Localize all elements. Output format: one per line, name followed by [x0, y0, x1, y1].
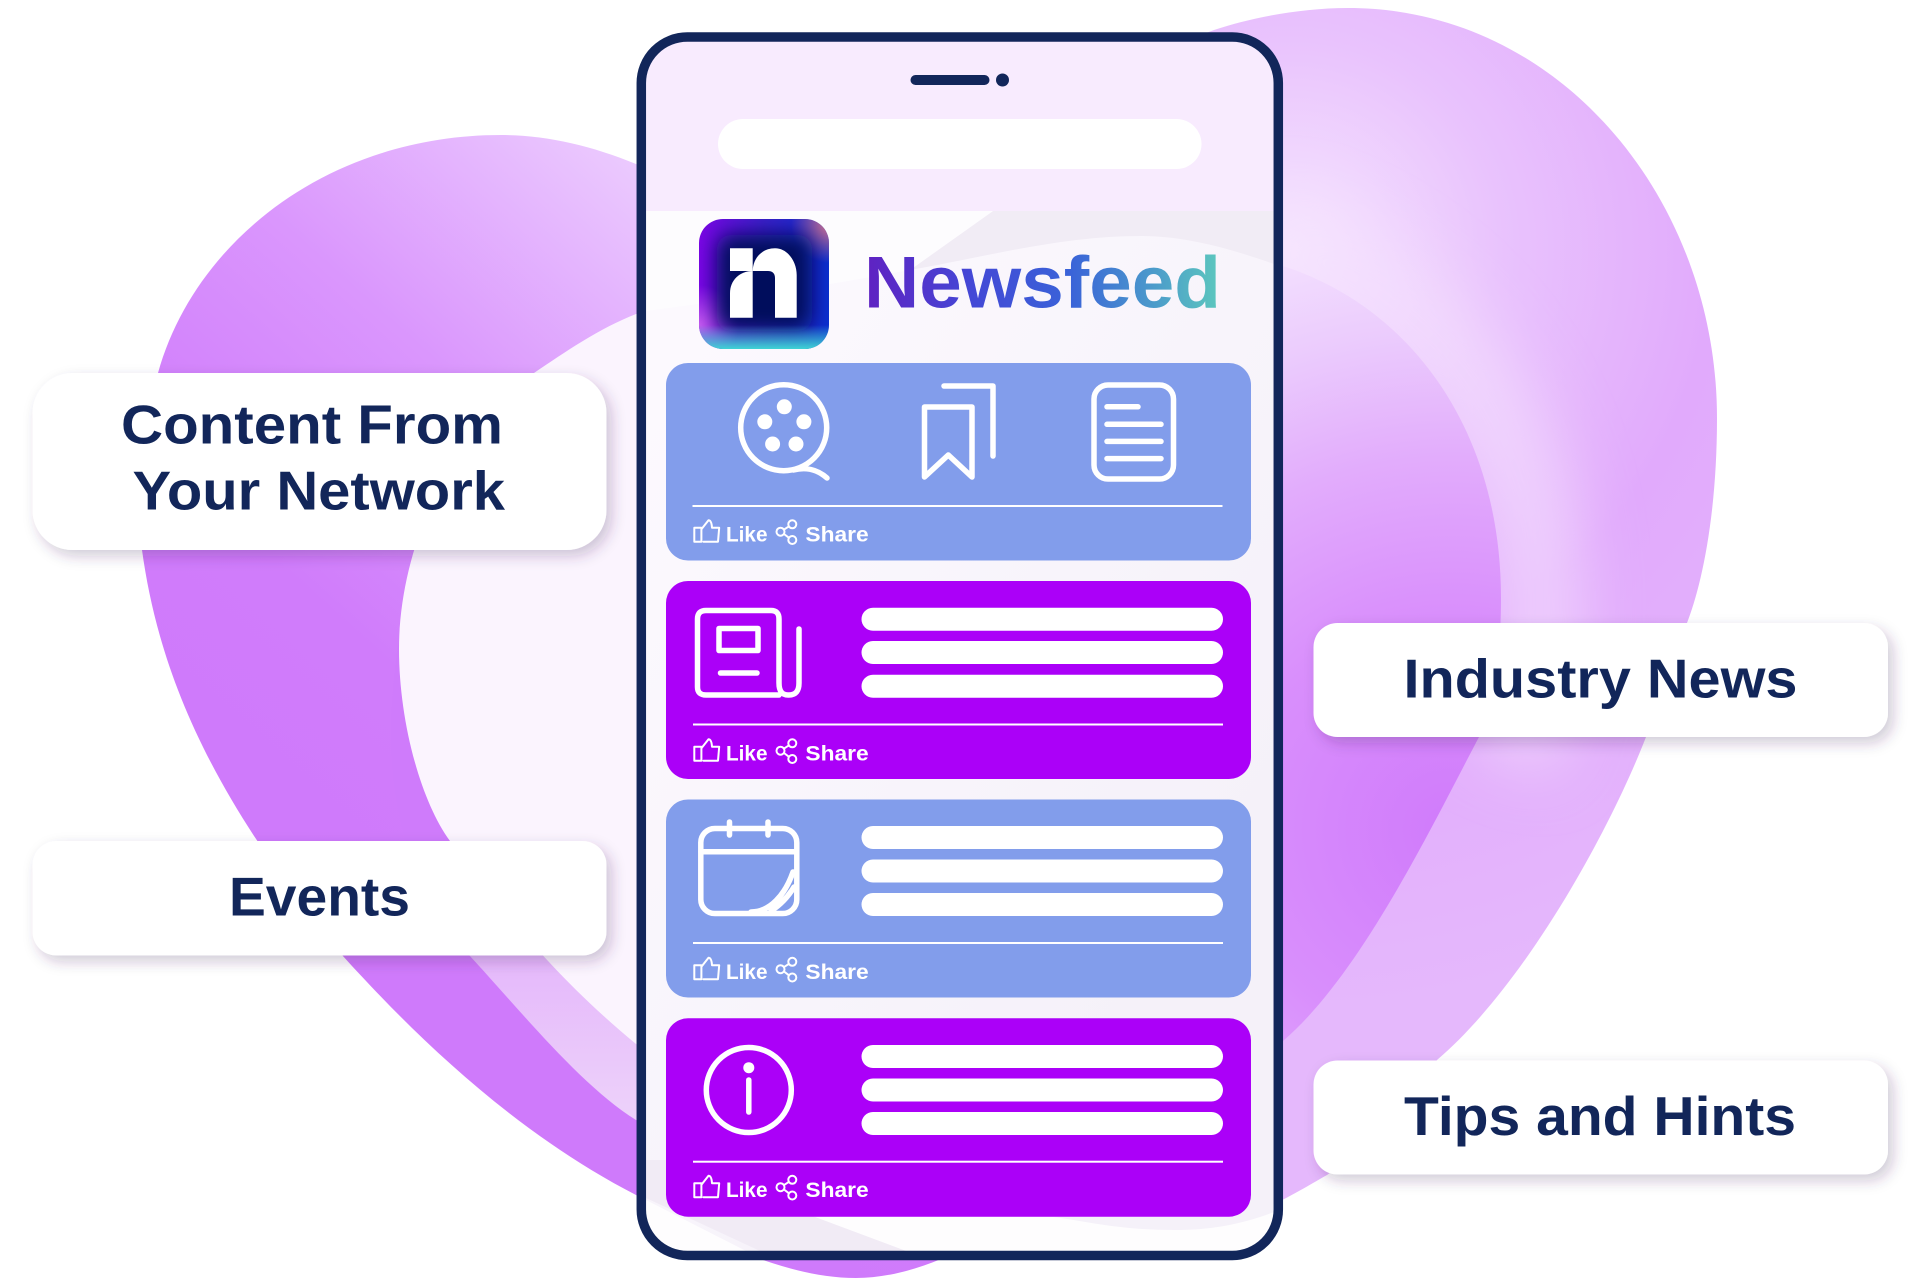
callout: events [32, 841, 606, 956]
background blob: middle left band [391, 640, 800, 1180]
card: media [666, 363, 1251, 560]
callout: events: Events [229, 866, 410, 928]
callout: industry news: Industry News [1404, 648, 1798, 710]
icon: info [706, 1048, 791, 1132]
callout: tips and hints [1314, 1060, 1888, 1174]
speaker and camera [910, 74, 1009, 86]
callout: content from your network: Your Network [132, 460, 505, 522]
like and share row: Like [726, 961, 768, 984]
like and share row: Share [805, 524, 869, 546]
title: Newsfeed: Newsfeed [864, 242, 1221, 324]
text lines [862, 1045, 1223, 1135]
background blob: middle right lobe [1200, 260, 1501, 1100]
divider [692, 505, 1222, 507]
background glow: pale band around inner lobe [1384, 284, 1604, 778]
like and share row: Share [805, 742, 869, 766]
phone screen [646, 41, 1274, 1251]
like and share row [694, 520, 869, 546]
background blob: inner pale heart [399, 300, 800, 1120]
phone frame [641, 37, 1278, 1256]
background blob: left lobe [140, 135, 1040, 1278]
logo tile [699, 219, 829, 349]
background blob: right outer lobe [900, 8, 1717, 1230]
icon: calendar [701, 822, 797, 914]
logo letter n [730, 248, 797, 318]
divider [693, 942, 1223, 944]
like and share row [694, 1176, 869, 1202]
like and share row: Like [726, 524, 768, 546]
like and share row: Share [805, 1179, 869, 1202]
phone [641, 37, 1278, 1256]
callout: industry news [1314, 623, 1888, 737]
icon: document [1094, 385, 1174, 479]
card: tips [666, 1018, 1251, 1217]
like and share row: Like [726, 1179, 768, 1202]
callout: tips and hints: Tips and Hints [1404, 1085, 1796, 1147]
icon: newspaper [698, 610, 799, 695]
search bar [718, 119, 1202, 169]
text lines [862, 826, 1223, 916]
divider [693, 724, 1223, 726]
card: events [666, 800, 1251, 998]
like and share row [694, 739, 869, 766]
icon: film reel [741, 385, 827, 478]
card: industry news [666, 581, 1251, 779]
text lines [862, 608, 1223, 698]
like and share row: Share [805, 961, 869, 984]
like and share row [694, 958, 869, 984]
like and share row: Like [726, 742, 768, 766]
icon: bookmarks [924, 386, 993, 477]
callout: content from your network [32, 373, 606, 550]
divider [693, 1161, 1223, 1163]
callout: content from your network: Content From [121, 394, 503, 456]
